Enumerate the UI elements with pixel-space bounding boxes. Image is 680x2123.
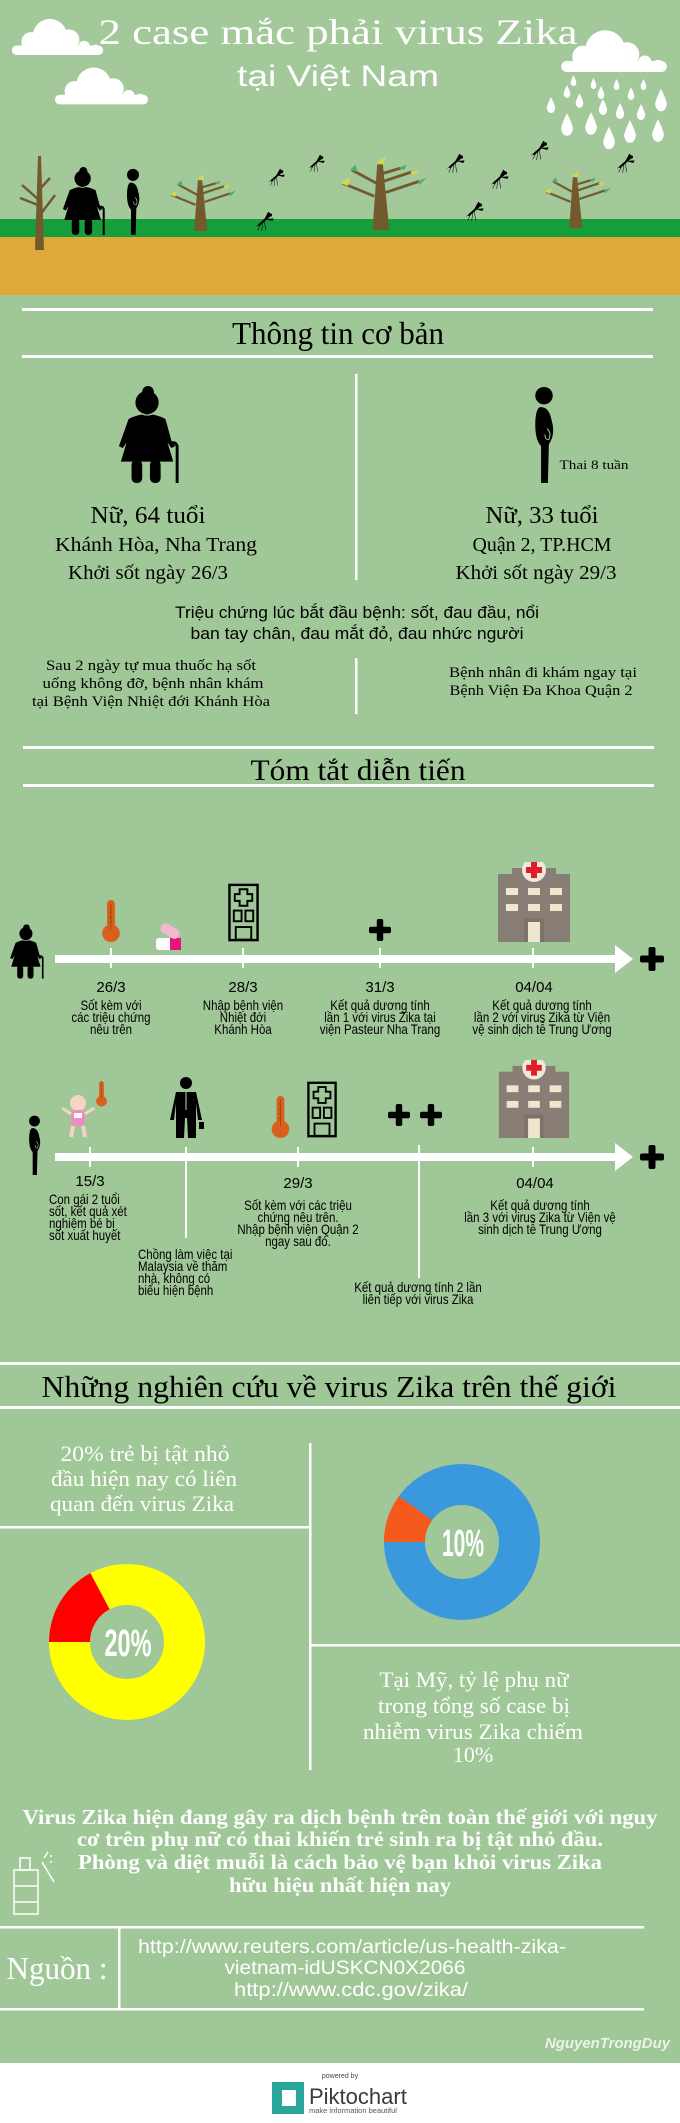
section: Tóm tắt diễn tiến heading: Tóm tắt diễn tiến bbox=[250, 754, 466, 787]
patient 1 bbox=[55, 386, 257, 584]
section: research heading bbox=[0, 1362, 680, 1409]
patient 2: Khởi sốt ngày 29/3 bbox=[456, 562, 616, 584]
clouds bbox=[12, 19, 667, 104]
section: Thông tin cơ bản bbox=[22, 308, 653, 714]
patient 1: Khánh Hòa, Nha Trang bbox=[55, 534, 257, 556]
timeline 1 texts bbox=[71, 979, 612, 1037]
people bbox=[63, 167, 139, 235]
patient 1: Khởi sốt ngày 26/3 bbox=[68, 562, 228, 584]
timeline 2 texts: Con gái 2 tuổi bbox=[49, 1191, 120, 1207]
signature: NguyenTrongDuy bbox=[545, 2035, 671, 2052]
header scene bbox=[0, 0, 680, 295]
mosquitoes bbox=[256, 141, 635, 231]
footer: piktochart bbox=[0, 2063, 680, 2123]
text: USA: Tại Mỹ, tỷ lệ phụ nữ bbox=[380, 1667, 570, 1692]
timeline 2 texts: Nhập bệnh viện Quận 2 bbox=[237, 1221, 359, 1237]
timeline 1 texts: viện Pasteur Nha Trang bbox=[320, 1021, 440, 1037]
patient 2: Thai 8 tuần bbox=[560, 457, 629, 472]
message: Virus Zika hiện đang gây ra dịch bệnh trên toàn thế giới với nguy bbox=[22, 1805, 658, 1829]
timeline 1 texts: 26/3 bbox=[96, 979, 126, 996]
title bbox=[98, 12, 578, 93]
timeline 1 texts: Nhập bệnh viện bbox=[203, 997, 283, 1013]
timeline 2 texts: Chồng làm việc tại bbox=[138, 1246, 232, 1262]
timeline 1 texts: 31/3 bbox=[365, 979, 395, 996]
timeline 1 texts: lần 1 với virus Zika tại bbox=[324, 1009, 436, 1025]
timeline 1 texts: vệ sinh dịch tễ Trung Ương bbox=[472, 1021, 612, 1037]
symptoms: Triệu chứng lúc bắt đầu bệnh: sốt, đau đầu, nổi bbox=[175, 603, 539, 622]
sources bbox=[0, 1926, 644, 2010]
trees bbox=[20, 156, 611, 250]
research panels bbox=[0, 1441, 680, 1770]
donut 20% bbox=[49, 1573, 184, 1700]
patient 2: Quận 2, TP.HCM bbox=[472, 534, 612, 556]
notes: Sau 2 ngày tự mua thuốc hạ sốt bbox=[46, 658, 257, 674]
timeline 1 texts: lần 2 với virus Zika từ Viện bbox=[474, 1009, 610, 1025]
text: USA: trong tổng số case bị bbox=[378, 1693, 570, 1718]
timeline 2 texts: ngay sau đó. bbox=[265, 1233, 331, 1249]
timeline 2 texts: sốt xuất huyết bbox=[49, 1227, 121, 1243]
timeline 2 texts: sốt, kết quả xét bbox=[49, 1203, 127, 1219]
notes: Bệnh nhân đi khám ngay tại bbox=[449, 665, 637, 681]
notes: uống không đỡ, bệnh nhân khám bbox=[42, 676, 264, 692]
timeline 2 bbox=[29, 1056, 664, 1307]
patient 2: Nữ, 33 tuổi bbox=[486, 503, 599, 529]
text: 20% children: 20% trẻ bị tật nhỏ bbox=[60, 1441, 230, 1466]
message: hữu hiệu nhất hiện nay bbox=[229, 1873, 452, 1897]
patient 2 bbox=[456, 387, 629, 584]
timeline 2 texts: 15/3 bbox=[75, 1173, 105, 1190]
timeline 2 texts: nhà, không có bbox=[138, 1270, 210, 1286]
section: Tóm tắt diễn tiến heading bbox=[23, 746, 654, 787]
timeline 2 texts: sinh dịch tễ Trung Ương bbox=[478, 1221, 602, 1237]
text: USA: 10% bbox=[453, 1742, 493, 1767]
timeline 2 texts: Malaysia về thăm bbox=[138, 1258, 227, 1274]
icon: spray bbox=[14, 1852, 54, 1914]
sources: vietnam-idUSKCN0X2066 bbox=[224, 1958, 466, 1979]
heading: Thông tin cơ bản bbox=[232, 315, 444, 351]
timeline 2 texts: lần 3 với virus Zika từ Viện vệ bbox=[464, 1209, 616, 1225]
donut 10%: 10% bbox=[442, 1523, 484, 1565]
footer: piktochart: powered by bbox=[322, 2073, 359, 2080]
timeline 1 texts: 04/04 bbox=[515, 979, 553, 996]
timeline 2 texts bbox=[49, 1173, 616, 1307]
text: 20% children bbox=[50, 1441, 237, 1516]
icon: businessman bbox=[170, 1077, 204, 1138]
icon: baby bbox=[62, 1095, 94, 1137]
timeline 2 texts: biểu hiện bệnh bbox=[138, 1282, 213, 1298]
timeline 2 texts: chứng nêu trên. bbox=[257, 1209, 339, 1225]
timeline 2 texts: liên tiếp với virus Zika bbox=[363, 1291, 474, 1307]
message: cơ trên phụ nữ có thai khiến trẻ sinh ra bị tật nhỏ đầu. bbox=[77, 1827, 603, 1851]
timeline 2 texts: 29/3 bbox=[283, 1175, 313, 1192]
section: research heading: Những nghiên cứu về virus Zika trên thế giới bbox=[42, 1369, 617, 1404]
title: tại Việt Nam bbox=[237, 60, 439, 93]
timeline 1 texts: các triệu chứng bbox=[71, 1009, 151, 1025]
sources: http://www.cdc.gov/zika/ bbox=[234, 1980, 469, 2001]
timeline 1 texts: 28/3 bbox=[228, 979, 258, 996]
notes: tại Bệnh Viện Nhiệt đới Khánh Hòa bbox=[32, 694, 270, 710]
text: USA: nhiễm virus Zika chiếm bbox=[363, 1719, 583, 1744]
timeline 2 texts: 04/04 bbox=[516, 1175, 554, 1192]
donut 10% bbox=[384, 1484, 520, 1600]
timeline 1 texts: Khánh Hòa bbox=[214, 1021, 272, 1037]
timeline 2 texts: nghiệm bé bị bbox=[49, 1215, 115, 1231]
timeline 1 bbox=[10, 858, 664, 1037]
timeline 1 texts: Kết quả dương tính bbox=[330, 997, 430, 1013]
symptoms bbox=[175, 603, 539, 643]
timeline 1 texts: Kết quả dương tính bbox=[492, 997, 592, 1013]
notes: Bệnh Viện Đa Khoa Quận 2 bbox=[450, 683, 632, 699]
timeline 1 texts: Nhiệt đới bbox=[220, 1009, 266, 1025]
sources: http://www.reuters.com/article/us-health-zika- bbox=[138, 1937, 566, 1958]
text: 20% children: đầu hiện nay có liên bbox=[51, 1466, 237, 1491]
message bbox=[22, 1805, 658, 1897]
footer: piktochart: Piktochart bbox=[309, 2084, 407, 2109]
timeline 2 texts: Kết quả dương tính bbox=[490, 1197, 590, 1213]
text: USA bbox=[363, 1667, 583, 1767]
patient 1: Nữ, 64 tuổi bbox=[90, 503, 206, 529]
text: 20% children: quan đến virus Zika bbox=[50, 1491, 234, 1516]
sources: Nguồn : bbox=[6, 1950, 108, 1986]
symptoms: ban tay chân, đau mắt đỏ, đau nhức người bbox=[190, 624, 524, 643]
timeline 1 texts: Sốt kèm với bbox=[80, 997, 142, 1013]
icon: pills bbox=[156, 922, 181, 950]
title: 2 case mắc phải virus Zika bbox=[98, 12, 578, 52]
timeline 2 texts: Kết quả dương tính 2 lần bbox=[354, 1279, 482, 1295]
timeline 1 texts: nêu trên bbox=[90, 1021, 132, 1037]
timeline 2 texts: Sốt kèm với các triệu bbox=[244, 1197, 352, 1213]
donut 20%: 20% bbox=[104, 1623, 152, 1665]
message: Phòng và diệt muỗi là cách bảo vệ bạn khỏi virus Zika bbox=[78, 1850, 603, 1874]
notes bbox=[32, 658, 637, 710]
rain drops bbox=[547, 75, 667, 149]
footer: piktochart: make information beautiful bbox=[309, 2106, 397, 2115]
